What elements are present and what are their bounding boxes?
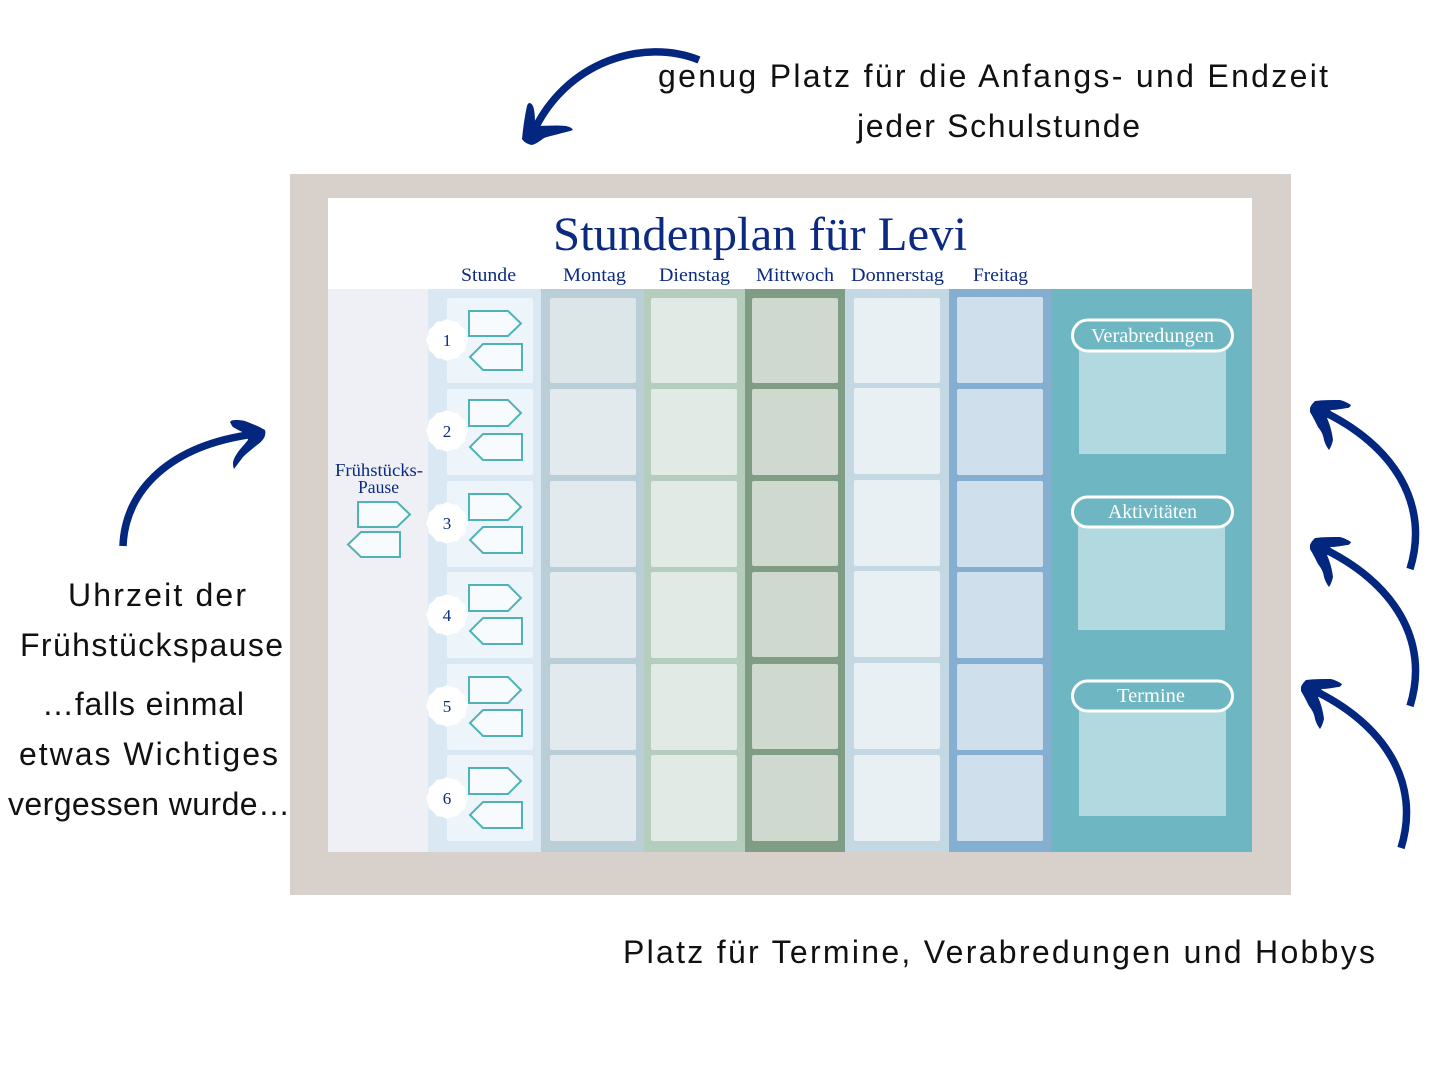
arrow: right to Verabredungen <box>1310 400 1416 569</box>
arrow: top pointing to schedule <box>522 52 699 145</box>
column headings: Donnerstag <box>851 265 945 286</box>
column: Stunde <box>426 289 541 852</box>
column: Donnerstag <box>845 289 949 852</box>
badge: lesson 3 <box>426 502 468 544</box>
column: Frühstückspause: Frühstücks- <box>335 460 423 480</box>
panel: timetable frame <box>290 174 1291 895</box>
badge: lesson 5 <box>426 685 468 727</box>
column: Mittwoch <box>745 289 845 852</box>
badge: lesson 6 <box>426 777 468 819</box>
badge: lesson 1: 1 <box>443 331 451 350</box>
badge: lesson 6: 6 <box>443 789 451 808</box>
annotation: top text: genug Platz für die Anfangs- und Endzeit <box>658 58 1328 94</box>
badge: lesson 4 <box>426 594 468 636</box>
box: Verabredungen: Verabredungen <box>1091 325 1214 347</box>
column: Frühstückspause <box>328 289 428 852</box>
annotation: left text: vergessen wurde… <box>8 786 290 822</box>
annotation: left text <box>8 577 290 822</box>
column: Dienstag <box>644 289 745 852</box>
column headings: Montag <box>563 265 627 286</box>
box: Termine <box>1072 681 1232 816</box>
arrow: right to Aktivitäten <box>1310 537 1416 706</box>
badge: lesson 2 <box>426 410 468 452</box>
annotation: top text <box>658 58 1328 144</box>
box: Aktivitäten <box>1072 497 1232 630</box>
column headings <box>461 265 1029 286</box>
box: Termine: Termine <box>1117 685 1185 707</box>
annotation: top text: jeder Schulstunde <box>856 108 1140 144</box>
badge: lesson 2: 2 <box>443 422 451 441</box>
column headings: Dienstag <box>659 265 731 286</box>
badge: lesson 4: 4 <box>443 606 452 625</box>
badge: lesson 1 <box>426 319 468 361</box>
column: Montag <box>541 289 644 852</box>
arrow: left pointing to breakfast column <box>123 420 265 546</box>
badge: lesson 3: 3 <box>443 514 451 533</box>
column headings: Mittwoch <box>756 265 835 286</box>
annotation: left text: Frühstückspause <box>20 627 283 663</box>
arrow: right to Termine <box>1301 679 1407 848</box>
column: Freitag <box>949 289 1051 852</box>
box: Aktivitäten: Aktivitäten <box>1108 501 1197 523</box>
box: Verabredungen <box>1072 320 1232 454</box>
annotation: bottom text: Platz für Termine, Verabredungen und Hobbys <box>623 934 1375 970</box>
column: Frühstückspause: Pause <box>358 477 399 497</box>
annotation: left text: Uhrzeit der <box>68 577 246 613</box>
badge: lesson 5: 5 <box>443 697 451 716</box>
column headings: Freitag <box>973 265 1029 286</box>
annotation: left text: …falls einmal <box>42 686 244 722</box>
annotation: left text: etwas Wichtiges <box>19 736 278 772</box>
title: Stundenplan für Levi <box>553 208 967 261</box>
column headings: Stunde <box>461 265 516 286</box>
panel: side notes <box>1051 289 1252 852</box>
